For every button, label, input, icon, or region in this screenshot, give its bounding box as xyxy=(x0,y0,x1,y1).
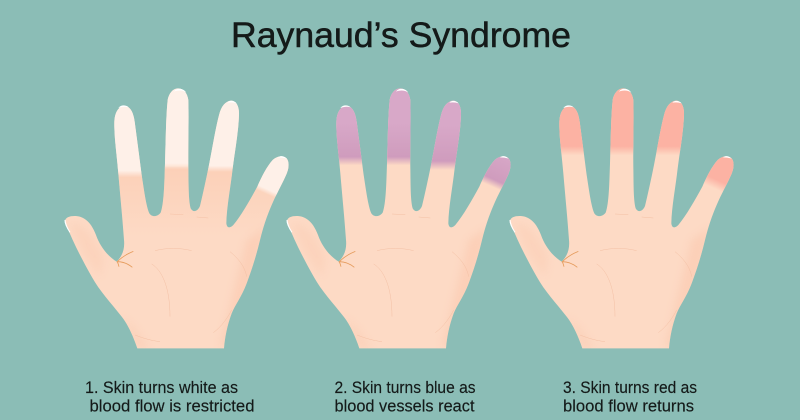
hand 3: red fingertips xyxy=(510,88,734,348)
caption 2: blood vessels react xyxy=(334,398,475,416)
hand 2: blue fingertips xyxy=(286,88,511,348)
caption 3: 3. Skin turns red as xyxy=(563,379,697,397)
title: Raynaud’s Syndrome xyxy=(231,16,571,55)
caption 1: blood flow is restricted xyxy=(90,398,254,416)
hand 1: white fingertips xyxy=(64,88,289,348)
caption 1 xyxy=(85,379,254,416)
caption 3 xyxy=(563,379,697,416)
caption 2: 2. Skin turns blue as xyxy=(334,379,476,397)
darker finger bases on hand 1 xyxy=(118,167,288,201)
caption 1: 1. Skin turns white as xyxy=(85,379,238,397)
caption 2 xyxy=(334,379,476,416)
caption 3: blood flow returns xyxy=(563,398,694,416)
